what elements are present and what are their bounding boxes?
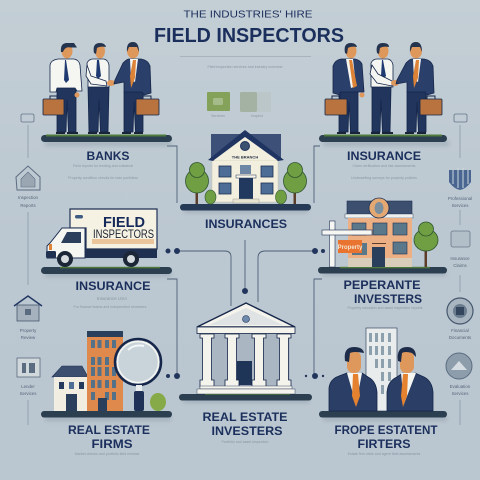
title: THE INDUSTRIES' HIRE <box>184 8 312 20</box>
heading: real estate firms: REAL ESTATE <box>68 423 150 437</box>
panel: real estate firms <box>41 331 172 456</box>
center green icons: Inspect <box>251 114 263 118</box>
title: Field inspection services and industry overview <box>208 65 283 69</box>
icon: left tree <box>186 162 216 204</box>
right side icon column <box>446 114 473 425</box>
heading: real estate investers <box>202 410 288 438</box>
platform: bank <box>179 394 312 403</box>
description: peperante: Property valuation and asset inspection reports <box>348 306 423 310</box>
right side icon column: Evaluation <box>450 384 471 389</box>
description: insurance: Claim verification and risk assessments <box>353 164 416 168</box>
right side icon column: Insurance <box>450 256 470 261</box>
description: insurance: Underwriting surveys for property policies <box>351 176 417 180</box>
left side icon column: Inspection <box>18 195 39 200</box>
person: suited inspector <box>325 43 364 134</box>
left side icon column: Review <box>21 335 36 340</box>
icon: office tower <box>87 331 123 411</box>
platform: property <box>318 267 447 276</box>
center green icons <box>207 92 271 118</box>
right side icon column: Financial <box>451 328 469 333</box>
left side icon column <box>14 114 42 425</box>
heading: insurance: INSURANCE <box>347 149 421 163</box>
description: insurance <box>351 164 417 180</box>
icon: bush <box>150 393 166 411</box>
heading: peperante investers: PEPERANTE <box>344 278 420 292</box>
heading: real estate investers: REAL ESTATE <box>202 410 288 424</box>
description: firms: Market checks and portfolio field reviews <box>75 452 140 456</box>
icon: bank building <box>197 303 295 394</box>
icon: for sale sign: Property <box>338 245 363 251</box>
description: banks: Property condition checks for loan portfolios <box>68 176 138 180</box>
person: inspector with briefcase <box>43 43 82 134</box>
platform: suits <box>319 411 447 421</box>
heading: real estate firms: FIRMS <box>92 437 132 451</box>
description: insurance <box>74 296 147 309</box>
icon: orange building <box>345 198 413 267</box>
panel: insurance <box>319 42 449 180</box>
platform: insurance <box>319 134 449 146</box>
right side icon column: Professional <box>448 196 472 201</box>
person: suited client <box>114 42 159 134</box>
platform: banks <box>41 134 172 146</box>
person: suited client <box>396 42 442 134</box>
icon: truck <box>46 209 157 267</box>
description: banks <box>68 164 138 180</box>
icon: small house <box>52 366 88 411</box>
icon: tree <box>414 222 438 267</box>
right side icon column: Claims <box>453 263 468 268</box>
heading: frope estatent firters <box>334 423 438 451</box>
platform: firms <box>41 411 172 421</box>
left side icon column: Reports <box>20 203 36 208</box>
person: handshake inspector <box>370 43 399 134</box>
person: right agent <box>387 347 433 411</box>
heading: real estate investers: INVESTERS <box>212 424 282 438</box>
title: FIELD INSPECTORS <box>154 25 344 47</box>
icon: right tree <box>276 162 306 204</box>
description: investers: Portfolio and asset inspection <box>222 440 268 444</box>
heading: real estate firms <box>68 423 150 451</box>
description: banks: Field reports for lending and collateral <box>73 164 133 168</box>
heading: frope estatent firters: FIRTERS <box>358 437 410 451</box>
left side icon column: Lender <box>21 384 35 389</box>
heading: frope estatent firters: FROPE ESTATENT <box>334 423 438 437</box>
right side icon column: Documents <box>449 335 472 340</box>
panel: property estatent firters <box>319 328 447 456</box>
panel: insurances house <box>180 130 311 231</box>
platform: house <box>180 204 311 213</box>
description: firters: Estate firm visits and agent field assessments <box>348 452 421 456</box>
right side icon column: Services <box>452 203 469 208</box>
icon: truck: INSPECTORS <box>93 227 154 241</box>
icon: glass tower <box>366 328 397 411</box>
icon: magnifying glass <box>115 339 161 411</box>
person: left agent <box>329 347 377 411</box>
icon: house: THE BRANCH <box>232 154 258 160</box>
connector lines <box>166 146 325 379</box>
heading: insurances: INSURANCES <box>205 217 287 231</box>
center green icons: Services <box>211 114 225 118</box>
description: insurance: Insurance USA <box>97 296 127 301</box>
left side icon column: Services <box>20 391 37 396</box>
heading: peperante investers: INVESTERS <box>354 292 422 306</box>
person: handshake inspector <box>86 43 115 134</box>
panel: real estate investers <box>179 303 312 444</box>
title <box>154 8 344 69</box>
platform: truck <box>41 267 172 277</box>
panel: property investors <box>318 198 447 310</box>
icon: truck: FIELD <box>103 214 145 231</box>
heading: peperante investers <box>344 278 422 306</box>
heading: banks: BANKS <box>86 149 130 163</box>
panel: field inspectors truck <box>41 209 172 309</box>
panel: banks <box>41 42 172 180</box>
heading: insurance: INSURANCE <box>76 279 150 293</box>
left side icon column: Property <box>20 328 37 333</box>
right side icon column: Services <box>452 391 469 396</box>
description: insurance: For finance teams and independent reviewers <box>74 305 147 309</box>
